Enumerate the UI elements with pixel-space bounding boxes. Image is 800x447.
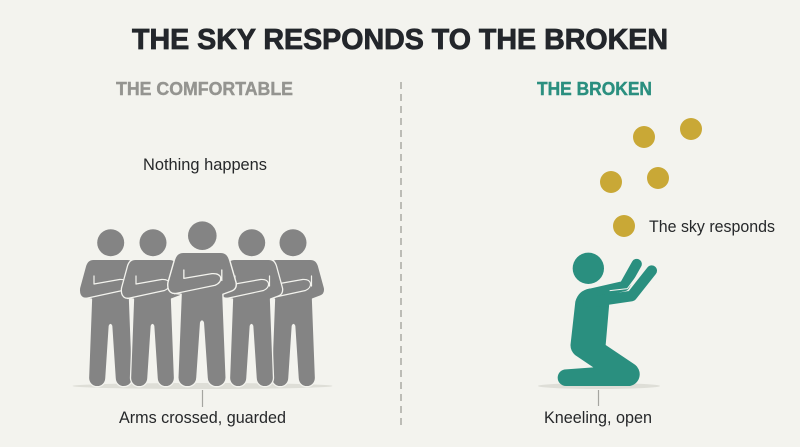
title: THE SKY RESPONDS TO THE BROKEN xyxy=(132,24,668,56)
heading: the broken: THE BROKEN xyxy=(537,79,652,99)
center divider xyxy=(400,82,402,428)
body xyxy=(558,289,640,386)
figure 1 xyxy=(79,229,142,387)
head xyxy=(573,253,604,284)
raised arm, back xyxy=(588,264,637,294)
group of five standing figures with crossed arms xyxy=(79,221,325,387)
gap between arms xyxy=(610,275,637,291)
ground shadow: left xyxy=(72,383,332,389)
circle 3 xyxy=(600,171,622,193)
circle 1 xyxy=(633,126,655,148)
figure 3, center xyxy=(168,221,236,387)
label: the sky responds: The sky responds xyxy=(649,217,775,236)
ground shadow: right xyxy=(538,383,660,389)
label: kneeling, open: Kneeling, open xyxy=(544,408,652,427)
figure 4 xyxy=(220,229,283,387)
circle 4 xyxy=(647,167,669,189)
label: nothing happens: Nothing happens xyxy=(143,155,267,174)
figure 2 xyxy=(121,229,184,387)
circle 5 xyxy=(613,215,635,237)
figure 5 xyxy=(262,229,325,387)
gold circles falling from sky xyxy=(600,118,702,237)
heading: the comfortable: THE COMFORTABLE xyxy=(116,79,293,99)
label: arms crossed, guarded: Arms crossed, guarded xyxy=(119,408,286,427)
pointer line: right xyxy=(598,390,600,406)
raised arm, front xyxy=(588,271,652,302)
circle 2 xyxy=(680,118,702,140)
pointer line: left xyxy=(202,390,204,407)
kneeling figure xyxy=(558,253,652,386)
